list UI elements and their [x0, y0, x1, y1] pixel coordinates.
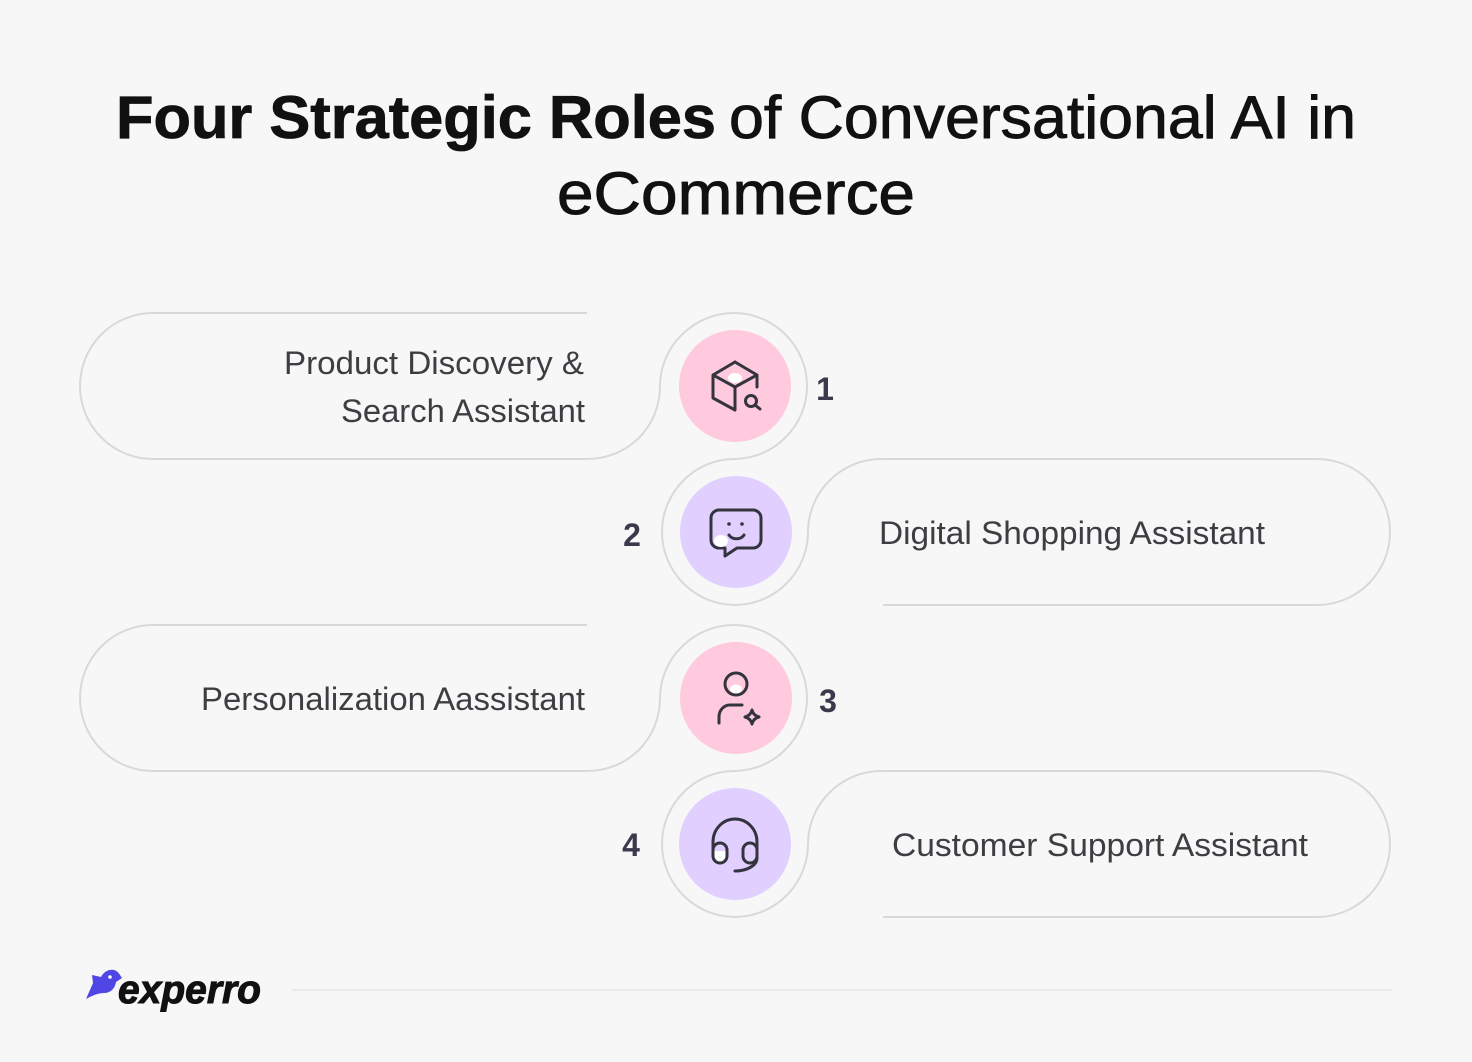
role 4 label: Customer Support Assistant — [892, 827, 1308, 863]
logo: experro: experro — [118, 968, 261, 1012]
icon: support headset — [679, 788, 791, 900]
role 2 label: Digital Shopping Assistant — [879, 515, 1265, 551]
footer rule — [292, 989, 1392, 991]
title: of Conversational AI in — [729, 84, 1356, 151]
role 1 label: Product Discovery & — [284, 345, 584, 381]
title — [116, 84, 1356, 227]
icon: personalized user — [680, 642, 792, 754]
title: Four Strategic Roles — [116, 84, 716, 151]
role 1 label: Search Assistant — [341, 393, 585, 429]
role 3 label: Personalization Aassistant — [201, 681, 585, 717]
title: eCommerce — [557, 160, 915, 227]
number 3: 3 — [819, 683, 837, 719]
number 2: 2 — [623, 517, 641, 553]
outline: roles 1 and 2 — [80, 313, 1390, 605]
role 1 label — [284, 345, 585, 429]
number 4: 4 — [622, 827, 640, 863]
icon: chat bubble — [680, 476, 792, 588]
outline: roles 3 and 4 — [80, 625, 1390, 917]
icon: product search box — [679, 330, 791, 442]
number 1: 1 — [816, 371, 834, 407]
